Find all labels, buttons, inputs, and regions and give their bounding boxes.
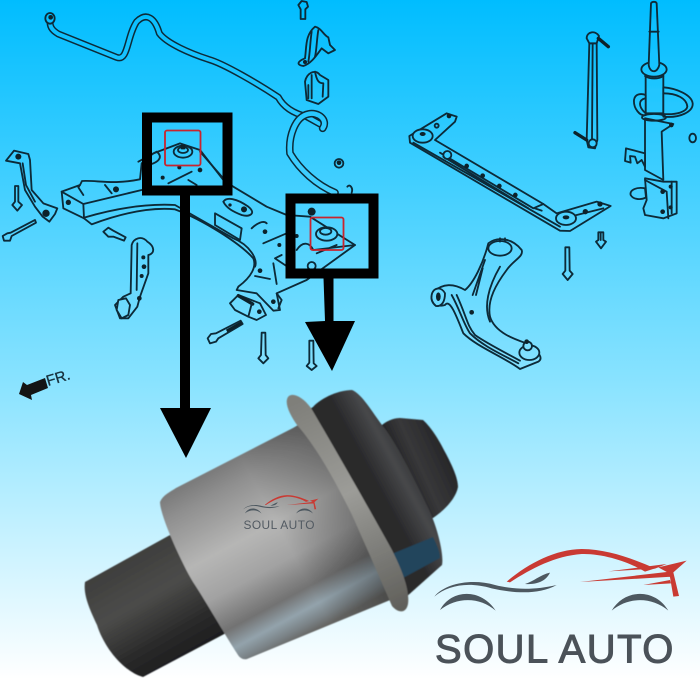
subframe crossmember body (62, 143, 355, 311)
rubber nub, right end (375, 418, 458, 520)
exploded suspension diagram, right (409, 2, 696, 369)
bolt, top (298, 1, 308, 19)
highlight box 2 (290, 198, 374, 274)
FR label: FR. (44, 367, 72, 390)
bolts, left (3, 186, 36, 241)
stabilizer bar (45, 13, 335, 193)
metal flange (287, 395, 408, 611)
stabilizer clamp (299, 27, 335, 66)
upper mount in box 1 (138, 145, 223, 185)
rubber collar (300, 390, 442, 598)
subframe drawing (62, 143, 355, 370)
strut assembly (625, 2, 693, 218)
metal sleeve (160, 418, 395, 659)
lower control arm (431, 238, 541, 369)
Soul Auto logo (434, 549, 687, 672)
front direction indicator (19, 367, 72, 400)
nut, right of strut (689, 134, 696, 142)
rear subframe bracket (230, 293, 282, 320)
stabilizer rubber mount (305, 72, 328, 104)
watermark car swoosh (243, 495, 318, 514)
bolts, bottom (208, 321, 317, 370)
red marker 2 (310, 218, 344, 250)
exploded suspension diagram, left (3, 1, 352, 241)
small bolt below subframe (103, 228, 126, 241)
logo car swoosh (434, 549, 687, 611)
product photo: subframe bushing (85, 390, 458, 677)
upper mount in box 2 (297, 208, 355, 270)
nuts, right of subframe (335, 159, 352, 193)
arrow from box 2 to bushing (305, 278, 355, 371)
collar blue reflection (382, 537, 440, 578)
lower bracket (115, 238, 153, 318)
watermark logo on sleeve (243, 495, 318, 532)
arrow from box 1 to bushing (160, 195, 211, 458)
rubber sleeve, left end (85, 535, 228, 677)
logo name: SOUL AUTO (435, 628, 673, 672)
watermark name: SOUL AUTO (243, 518, 314, 532)
bushing body parts (85, 390, 458, 677)
highlight box 1 (147, 118, 228, 190)
stabilizer link (575, 32, 608, 148)
bolts below brace (563, 232, 606, 280)
red marker 1 (165, 130, 200, 166)
sleeve shading (160, 418, 395, 659)
left link bracket (6, 151, 57, 222)
FR arrow (19, 378, 48, 400)
transverse link brace (409, 113, 611, 231)
